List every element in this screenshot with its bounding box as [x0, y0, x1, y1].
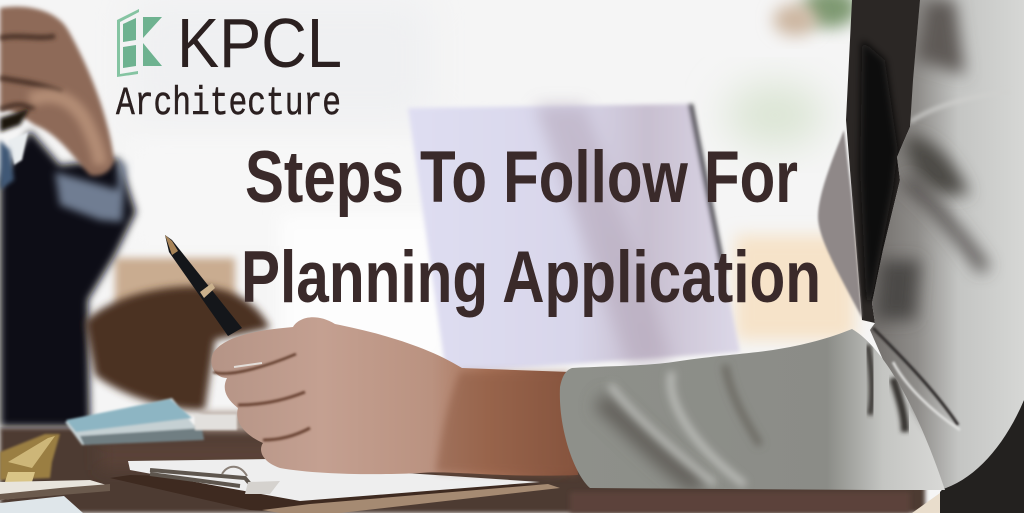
forearm: [555, 325, 955, 495]
dark suit: [0, 130, 136, 427]
blurred laptop: [408, 104, 740, 373]
title: Planning Application: [241, 237, 821, 318]
title: Steps To Follow For: [245, 137, 798, 218]
shirt cuff: [55, 160, 126, 222]
hand holding pen: [211, 317, 578, 476]
blue shirt edge: [0, 140, 14, 190]
title: [241, 137, 821, 318]
blurred brown hand: [85, 286, 270, 410]
blurred notepad: [65, 398, 237, 445]
white gap behind arm: [8, 132, 28, 165]
logo wordmark: KPCL: [177, 4, 342, 82]
table: [0, 412, 940, 513]
icon: KPCL mark: [117, 9, 162, 77]
pen: [165, 235, 242, 336]
logo: [116, 4, 342, 127]
dark jacket lining and waist: [846, 0, 1024, 513]
raised hand: [0, 7, 114, 176]
grey jacket sleeve: [555, 0, 1024, 500]
upper arm: [860, 0, 1024, 500]
lapel: [818, 130, 862, 318]
clipboard and paper: [110, 459, 560, 513]
clips and papers at left: [0, 434, 110, 513]
logo subtitle: Architecture: [116, 82, 341, 127]
blurred person on the left: [0, 7, 270, 427]
